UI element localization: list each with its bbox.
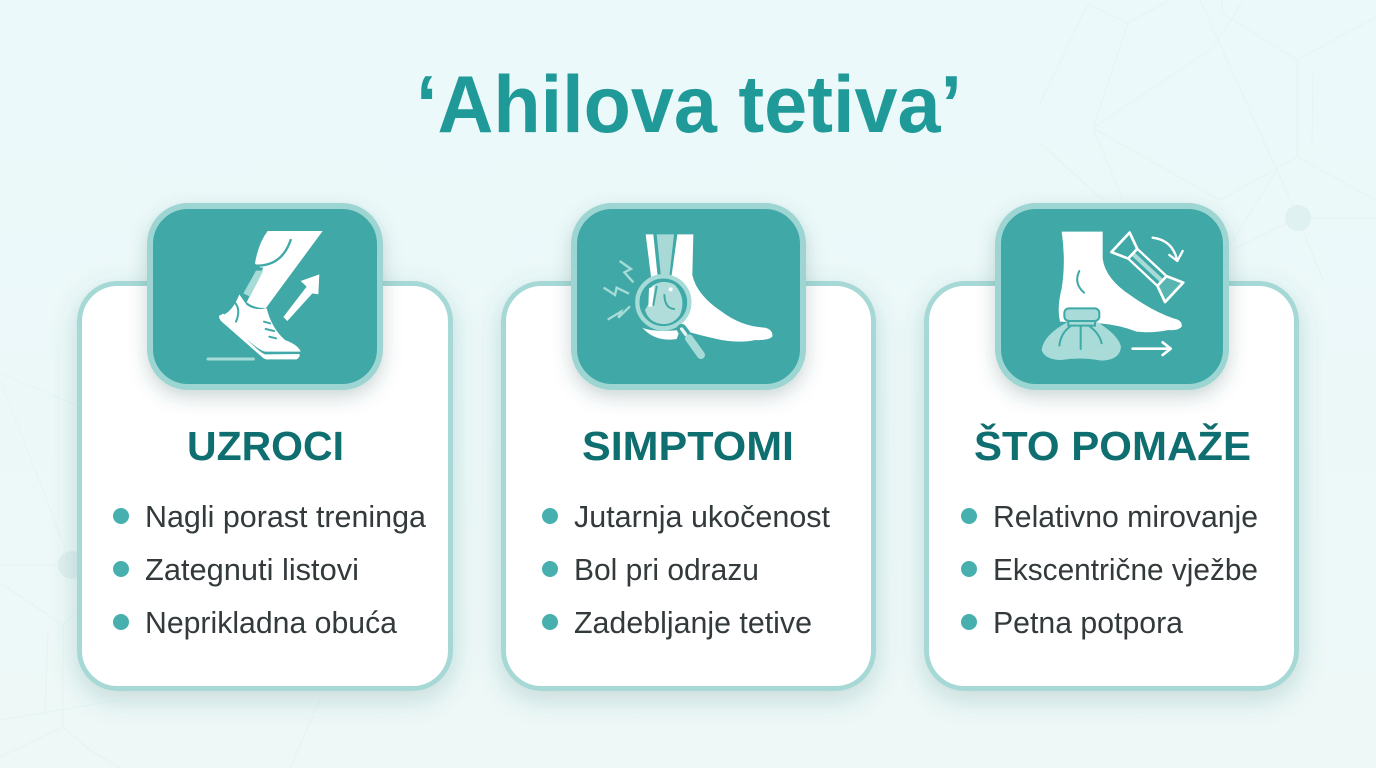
heading: SIMPTOMI (582, 423, 794, 469)
card background (80, 284, 450, 688)
icon tile: running foot (150, 206, 380, 387)
list item: Nagli porast treninga (145, 499, 427, 534)
list item: Zategnuti listovi (145, 552, 359, 587)
list item: Ekscentrične vježbe (993, 552, 1258, 587)
list item: Relativno mirovanje (993, 499, 1258, 534)
list item: Bol pri odrazu (574, 552, 759, 587)
list item: Jutarnja ukočenost (574, 499, 830, 534)
heading: UZROCI (187, 423, 344, 469)
panel: sto pomaze (926, 206, 1296, 688)
panel: simptomi (504, 206, 874, 688)
card background (926, 284, 1296, 688)
heading: ŠTO POMAŽE (974, 423, 1251, 469)
card background (504, 284, 874, 688)
panel: uzroci (80, 206, 450, 688)
list item: Petna potpora (993, 605, 1184, 640)
title: ‘Ahilova tetiva’ (416, 60, 962, 150)
list item: Neprikladna obuća (145, 605, 398, 640)
icon tile: foot with ice pack and exercise band (998, 206, 1226, 387)
list item: Zadebljanje tetive (574, 605, 812, 640)
icon tile: foot under magnifier (574, 206, 803, 387)
